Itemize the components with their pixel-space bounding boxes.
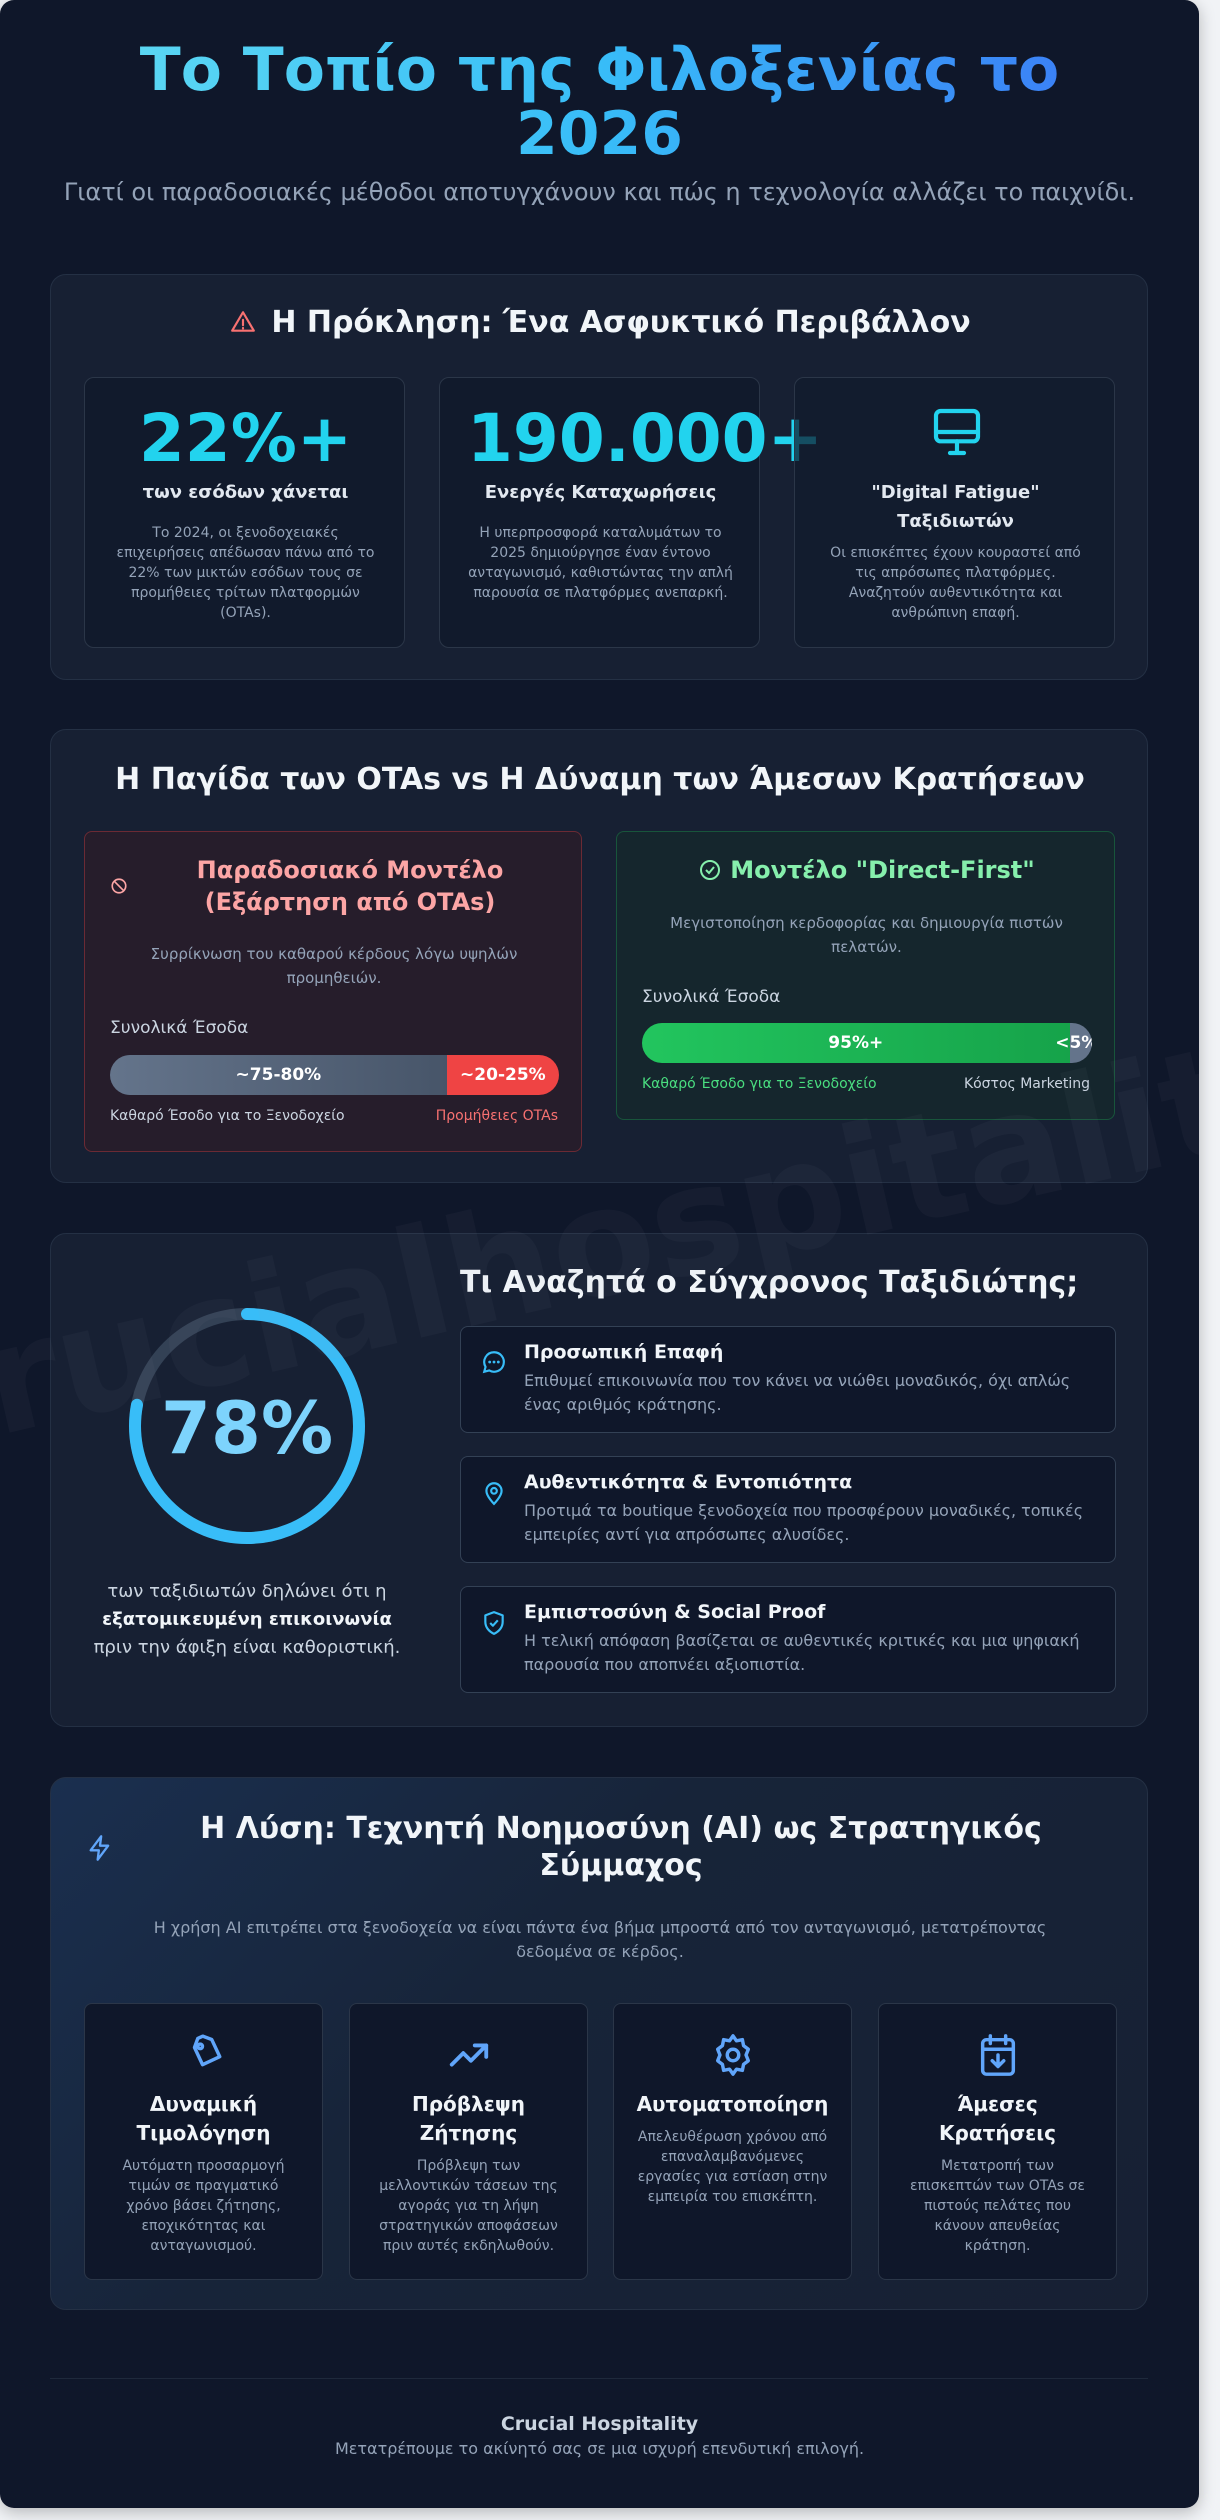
card: automation: Απελευθέρωση χρόνου από επαναλαμβανόμενες εργασίες για εστίαση στην εμπειρία του επισκέπτη. — [638, 2129, 827, 2205]
stat card 2: 190.000+ — [467, 400, 823, 477]
panel: OTA vs direct — [50, 729, 1148, 1183]
bar: OTA revenue split — [110, 1055, 559, 1095]
bar: OTA revenue split: ~75-80% — [236, 1065, 321, 1085]
card: traditional model: Συρρίκνωση του καθαρού κέρδους λόγω υψηλών προμηθειών. — [151, 945, 517, 987]
card: traditional model: (Εξάρτηση από OTAs) — [205, 888, 495, 916]
card: demand forecast — [349, 2003, 588, 2280]
card: direct bookings — [878, 2003, 1117, 2280]
heading: AI solution: Η Λύση: Τεχνητή Νοημοσύνη (AI) ως Στρατηγικός Σύμμαχος — [200, 1811, 1042, 1883]
stat card 2: Ενεργές Καταχωρήσεις — [485, 482, 716, 503]
stat card 1: 22%+ — [139, 400, 352, 477]
item: trust: Εμπιστοσύνη & Social Proof — [524, 1601, 825, 1623]
card: traditional model — [84, 831, 582, 1152]
card: dynamic pricing — [84, 2003, 323, 2280]
heading: OTA vs direct: Η Παγίδα των OTAs vs Η Δύναμη των Άμεσων Κρατήσεων — [115, 762, 1085, 797]
card: traditional model: Προμήθειες OTAs — [436, 1108, 558, 1124]
card: direct-first model: Κόστος Marketing — [964, 1076, 1090, 1092]
card: automation — [613, 2003, 852, 2280]
card: automation: Αυτοματοποίηση — [637, 2092, 828, 2116]
bar: direct revenue split — [642, 1023, 1092, 1063]
card: direct bookings: Άμεσες Κρατήσεις — [939, 2092, 1056, 2145]
item: authenticity — [460, 1456, 1116, 1563]
panel: challenge — [50, 274, 1148, 680]
item: trust: Η τελική απόφαση βασίζεται σε αυθεντικές κριτικές και μια ψηφιακή παρουσία που αποπνέει αξιοπιστία. — [524, 1631, 1079, 1674]
stat card 2: Η υπερπροσφορά καταλυμάτων το 2025 δημιούργησε έναν έντονο ανταγωνισμό, καθιστώντας την απλή παρουσία σε πλατφόρμες ανεπαρκή. — [468, 525, 733, 601]
footer: Crucial Hospitality — [501, 2413, 698, 2435]
heading: modern traveler: Τι Αναζητά ο Σύγχρονος Ταξιδιώτης; — [460, 1265, 1078, 1300]
item: authenticity: Προτιμά τα boutique ξενοδοχεία που προσφέρουν μοναδικές, τοπικές εμπειρίες αντί για απρόσωπες αλυσίδες. — [524, 1501, 1083, 1544]
panel: modern traveler — [50, 1233, 1148, 1727]
card: direct-first model: Μεγιστοποίηση κερδοφορίας και δημιουργία πιστών πελατών. — [670, 914, 1063, 956]
title: Το Τοπίο της Φιλοξενίας το — [140, 35, 1059, 105]
card: demand forecast: Πρόβλεψη Ζήτησης — [412, 2092, 525, 2145]
stat card 3: Ταξιδιωτών — [897, 511, 1014, 532]
stat card 1: των εσόδων χάνεται — [143, 482, 348, 503]
card: demand forecast: Πρόβλεψη των μελλοντικών τάσεων της αγοράς για τη λήψη στρατηγικών αποφάσεων πριν αυτές εκδηλωθούν. — [379, 2158, 558, 2254]
card: direct-first model: Καθαρό Έσοδο για το Ξενοδοχείο — [642, 1076, 877, 1092]
card: traditional model: Παραδοσιακό Μοντέλο — [197, 856, 503, 884]
card: dynamic pricing: Αυτόματη προσαρμογή τιμών σε πραγματικό χρόνο βάσει ζήτησης, εποχικότητας και ανταγωνισμού. — [122, 2158, 285, 2254]
footer: Μετατρέπουμε το ακίνητό σας σε μια ισχυρή επενδυτική επιλογή. — [335, 2439, 864, 2458]
card: dynamic pricing: Δυναμική Τιμολόγηση — [137, 2092, 270, 2145]
bar: OTA revenue split: ~20-25% — [460, 1065, 546, 1085]
title: 2026 — [516, 99, 683, 169]
card: direct-first model: Συνολικά Έσοδα — [642, 987, 780, 1007]
footer — [335, 2413, 864, 2458]
card: direct-first model: Μοντέλο "Direct-First" — [730, 856, 1035, 884]
item: personal contact — [460, 1326, 1116, 1433]
subtitle: Γιατί οι παραδοσιακές μέθοδοι αποτυγχάνουν και πώς η τεχνολογία αλλάζει το παιχνίδι. — [64, 178, 1135, 206]
stat card 2 — [439, 377, 760, 648]
card: direct-first model — [616, 831, 1115, 1120]
stat card 1 — [84, 377, 405, 648]
card: traditional model: Καθαρό Έσοδο για το Ξενοδοχείο — [110, 1108, 345, 1124]
heading: challenge: Η Πρόκληση: Ένα Ασφυκτικό Περιβάλλον — [271, 305, 971, 340]
chart: 78% ring — [129, 1308, 365, 1544]
panel: AI solution — [50, 1777, 1148, 2310]
stat card 3: "Digital Fatigue" — [871, 482, 1040, 503]
card: direct bookings: Μετατροπή των επισκεπτών των OTAs σε πιστούς πελάτες που κάνουν απευθείας κράτηση. — [910, 2158, 1085, 2254]
stat card 1: Το 2024, οι ξενοδοχειακές επιχειρήσεις απέδωσαν πάνω από το 22% των μικτών εσόδων τους σε προμήθειες τρίτων πλατφορμών (OTAs). — [117, 525, 374, 621]
item: personal contact: Επιθυμεί επικοινωνία που τον κάνει να νιώθει μοναδικός, όχι απλώς ένας αριθμός κράτησης. — [524, 1371, 1070, 1414]
ring caption: των ταξιδιωτών δηλώνει ότι η εξατομικευμένη επικοινωνία πριν την άφιξη είναι καθοριστική. — [94, 1581, 400, 1658]
icon: monitor — [934, 408, 980, 456]
item: authenticity: Αυθεντικότητα & Εντοπιότητα — [524, 1471, 852, 1493]
title — [140, 35, 1059, 169]
stat card 3 — [794, 377, 1115, 648]
bar: direct revenue split: 95%+ — [828, 1033, 883, 1053]
icon: ban — [111, 878, 127, 894]
icon: bolt — [90, 1835, 110, 1861]
AI subtitle: Η χρήση AI επιτρέπει στα ξενοδοχεία να είναι πάντα ένα βήμα μπροστά από τον ανταγωνισμό, μετατρέποντας δεδομένα σε κέρδος. — [154, 1918, 1046, 1961]
chart: 78% ring: 78% — [161, 1386, 333, 1470]
card: traditional model: Συνολικά Έσοδα — [110, 1018, 248, 1038]
stat card 3: Οι επισκέπτες έχουν κουραστεί από τις απρόσωπες πλατφόρμες. Αναζητούν αυθεντικότητα και ανθρώπινη επαφή. — [830, 545, 1081, 621]
item: trust — [460, 1586, 1116, 1693]
item: personal contact: Προσωπική Επαφή — [524, 1341, 723, 1363]
